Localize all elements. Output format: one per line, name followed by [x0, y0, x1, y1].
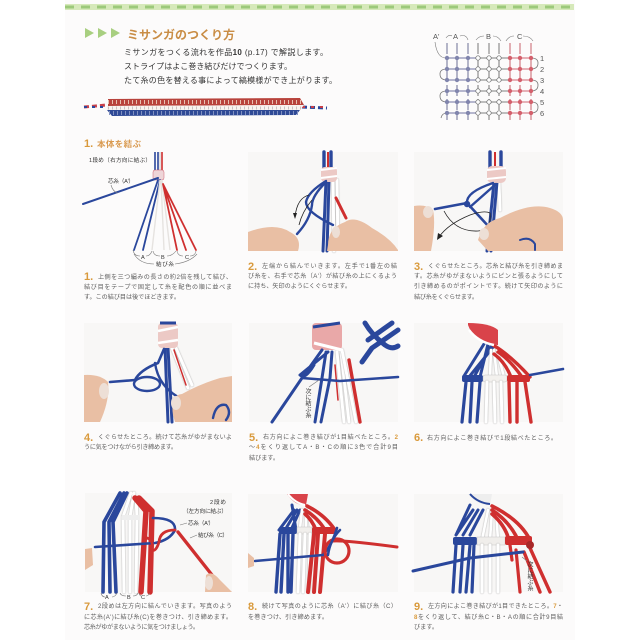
- step 4 caption: 4.: [84, 432, 93, 444]
- step 4 caption: [84, 432, 232, 451]
- diagram labels: 2: [540, 65, 544, 74]
- step 7 labels: 結び糸（C）: [198, 531, 228, 539]
- panel: step 9 photo: [413, 494, 563, 592]
- diagram labels: 4: [540, 87, 544, 96]
- right hand: [327, 220, 398, 251]
- left hand: [248, 553, 254, 568]
- step 7 labels: A: [105, 595, 109, 601]
- step 6 caption: 6.: [414, 432, 423, 444]
- panel: step 4 photo: [84, 323, 232, 422]
- step 4 caption: くぐらせたところ。続けて芯糸がゆがまないよ: [98, 433, 232, 441]
- step 9 caption: 9.: [414, 601, 423, 613]
- section heading: step 1: [84, 138, 141, 150]
- panel: step 7 photo: [85, 493, 232, 592]
- step 1 labels: [89, 156, 189, 268]
- step 7 caption: 芯糸がゆがまないように気をつけましょう。: [84, 623, 199, 631]
- intro text: [124, 47, 337, 85]
- step 7 caption: 2段めは左方向に結んでいきます。写真のよう: [98, 602, 232, 610]
- left hand: [248, 227, 299, 251]
- header triangles icon: [85, 28, 120, 38]
- step 3 caption: 引き締めるのがポイントです。続けて矢印のように: [414, 282, 563, 290]
- step 9 caption: 左方向によこ巻き結びが1目できたところ。7・: [428, 602, 563, 610]
- step 5 caption: 結びます。: [249, 454, 279, 462]
- diagram labels: B: [486, 32, 491, 41]
- step 4 caption: うに気をつけながら引き締めます。: [84, 443, 177, 451]
- blue knot detail inset: [362, 323, 398, 362]
- panel: step 6 photo: [414, 323, 563, 422]
- panel: step 2 photo: [248, 152, 398, 251]
- step 5 caption: [249, 432, 399, 462]
- step 8 caption: 8.: [248, 601, 257, 613]
- step 2 caption: [248, 261, 397, 290]
- step 3 caption: [414, 261, 563, 301]
- step 3 caption: す。芯糸がゆがまないようにピンと張るようにして: [414, 272, 563, 280]
- diagram labels: 5: [540, 98, 544, 107]
- diagram labels: 1: [540, 54, 544, 63]
- left hand: [84, 375, 108, 422]
- step 7 caption: 7.: [84, 601, 93, 613]
- step 7 labels: 芯糸（A'）: [188, 519, 214, 527]
- step 2 caption: 左端から結んでいきます。左手で1番左の結: [262, 262, 397, 270]
- step 1 caption: す。この結び目は後でほどきます。: [84, 293, 180, 301]
- step 7 labels: B: [127, 595, 131, 601]
- step 1 caption: 上側を三つ編みの長さの約2倍を残して結び、: [98, 273, 232, 281]
- step 1 labels: C: [185, 255, 189, 261]
- step 5 caption: 〜4をくり返してA・B・Cの順に3色で合計9目: [249, 443, 398, 451]
- step 1 labels: B: [161, 255, 165, 261]
- right hand: [205, 573, 232, 592]
- vertical label: next cord: 次に結ぶ糸: [304, 387, 311, 419]
- section heading: step 1: 本体を結ぶ: [97, 139, 141, 149]
- step 7 caption: [84, 601, 232, 631]
- diagram labels: C: [517, 32, 523, 41]
- left hand: [414, 206, 434, 251]
- step 2 caption: び糸を、右手で芯糸（A'）が結び糸の上にくるよう: [248, 272, 397, 280]
- diagram labels: A: [453, 32, 458, 41]
- diagram labels: 6: [540, 109, 544, 118]
- step 1 caption: [84, 271, 232, 301]
- step 6 caption: [414, 432, 557, 444]
- title: ミサンガのつくり方: [127, 27, 235, 42]
- step 1 caption: 結び目をテープで固定して糸を配色の順に並べま: [84, 283, 232, 291]
- step 7 labels: [101, 498, 228, 601]
- step 8 caption: を巻きつけ、引き締めます。: [248, 613, 328, 621]
- step 8 caption: 続けて写真のように芯糸（A'）に結び糸（C）: [262, 602, 397, 610]
- step 1 labels: 芯糸（A'）: [108, 177, 134, 185]
- diagram labels: 3: [540, 76, 544, 85]
- step 6 caption: 右方向によこ巻き結びで1段結べたところ。: [427, 434, 557, 442]
- right hand: [172, 376, 232, 422]
- step 7 labels: （左方向に結ぶ）: [183, 507, 227, 515]
- step 1 labels: A: [141, 255, 145, 261]
- intro text: たて糸の色を替える事によって縞模様ができ上がります。: [124, 75, 337, 85]
- step 2 caption: に持ち、矢印のようにくぐらせます。: [248, 282, 351, 290]
- step 9 caption: 8をくり返して、結び糸C・B・Aの順に合計9目結: [414, 613, 563, 621]
- knot pattern diagram: [433, 32, 544, 120]
- step 1 diagram: [83, 152, 197, 268]
- panel: step 5 photo: [249, 323, 398, 422]
- diagram labels: [433, 32, 544, 118]
- bracelet illustration: [84, 98, 327, 116]
- step 3 caption: 結び糸をくぐらせます。: [414, 293, 478, 301]
- vertical label: next cord: 次に結ぶ糸: [526, 560, 533, 592]
- step 8 caption: [248, 601, 397, 621]
- intro text: ミサンガをつくる流れを作品10 (p.17) で解説します。: [124, 47, 328, 57]
- step 7 caption: に芯糸(A')に結び糸(C)を巻きつけ、引き締めます。: [84, 613, 232, 621]
- panel: step 3 photo: [414, 152, 563, 251]
- step 7 labels: C: [141, 595, 145, 601]
- step 5 caption: 5.: [249, 432, 258, 444]
- step 9 caption: びます。: [414, 623, 438, 631]
- step 1 labels: 1段め（右方向に結ぶ）: [89, 156, 151, 164]
- step 3 caption: 3.: [414, 261, 423, 273]
- panel: step 8 photo: [248, 494, 398, 592]
- intro text: ストライプはよこ巻き結びだけでつくります。: [124, 61, 292, 71]
- step 9 caption: [414, 601, 563, 631]
- section heading: step 1: 1.: [84, 138, 93, 150]
- step 1 caption: 1.: [84, 271, 93, 283]
- step 1 labels: 結び糸: [156, 260, 174, 268]
- step 7 labels: 2段め: [210, 498, 226, 506]
- step 2 caption: 2.: [248, 261, 257, 273]
- step 5 caption: 右方向によこ巻き結びが1目結べたところ。2: [263, 433, 399, 441]
- left hand: [85, 548, 93, 570]
- diagram labels: A': [433, 32, 440, 41]
- step 3 caption: くぐらせたところ。芯糸と結び糸を引き締めま: [428, 262, 563, 270]
- right hand: [478, 206, 563, 251]
